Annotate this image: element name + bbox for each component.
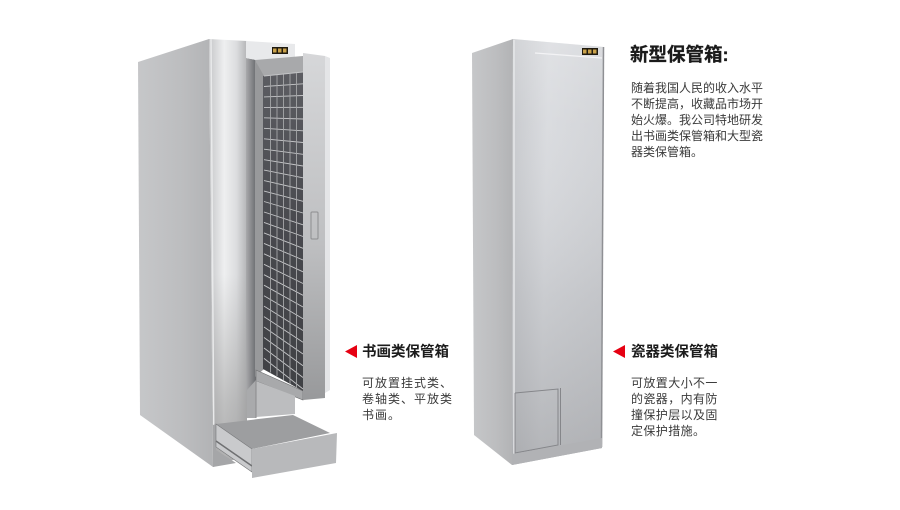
heading: new storage cabinets: 新型保管箱: — [630, 44, 729, 65]
cabinet side panel — [138, 39, 213, 467]
brand plate — [272, 47, 288, 54]
drawer side rail — [216, 424, 252, 472]
lower cabinet panel — [256, 381, 295, 417]
text block: calligraphy cabinet description: 可放置挂式类、 — [362, 375, 453, 390]
drawer bottom base — [213, 424, 236, 467]
text block: porcelain cabinet description: 撞保护层以及固 — [631, 407, 718, 422]
lower panels — [515, 388, 560, 453]
text block: introduction: 出书画类保管箱和大型瓷 — [631, 128, 763, 143]
top header band — [246, 41, 303, 76]
text block: porcelain cabinet description — [631, 375, 718, 438]
heading: calligraphy cabinet: 书画类保管箱 — [362, 342, 449, 360]
plinth — [512, 438, 602, 465]
text block: calligraphy cabinet description: 书画。 — [362, 408, 401, 422]
drawer inside — [216, 415, 330, 449]
text block: porcelain cabinet description: 定保护措施。 — [631, 423, 705, 438]
wire mesh rack — [263, 72, 303, 391]
cabinet front column — [209, 39, 247, 467]
text block: introduction: 随着我国人民的收入水平 — [631, 80, 763, 95]
rack bottom rail — [256, 370, 303, 400]
cabinet interior shadow — [246, 58, 256, 392]
text block: introduction: 不断提高，收藏品市场开 — [631, 96, 763, 111]
open door panel — [303, 53, 330, 400]
brand plate — [582, 48, 598, 55]
cabinet side panel — [472, 39, 513, 465]
cabinet front — [512, 39, 604, 465]
illustration: calligraphy and painting storage cabinet — [138, 39, 337, 478]
arrow: calligraphy label pointer — [345, 345, 357, 358]
drawer front face — [252, 433, 337, 478]
text block: introduction — [631, 80, 763, 159]
text block: porcelain cabinet description: 可放置大小不一 — [631, 375, 718, 390]
text block: introduction: 始火爆。我公司特地研发 — [631, 112, 763, 127]
text block: porcelain cabinet description: 的瓷器，内有防 — [631, 391, 718, 406]
text block: introduction: 器类保管箱。 — [631, 144, 703, 159]
text block: calligraphy cabinet description — [362, 375, 453, 422]
rack side rail — [255, 60, 264, 377]
arrow: porcelain label pointer — [613, 345, 625, 358]
illustration: porcelain storage cabinet — [472, 39, 604, 465]
text block: calligraphy cabinet description: 卷轴类、平放类 — [362, 391, 453, 406]
heading: porcelain cabinet: 瓷器类保管箱 — [631, 342, 718, 360]
